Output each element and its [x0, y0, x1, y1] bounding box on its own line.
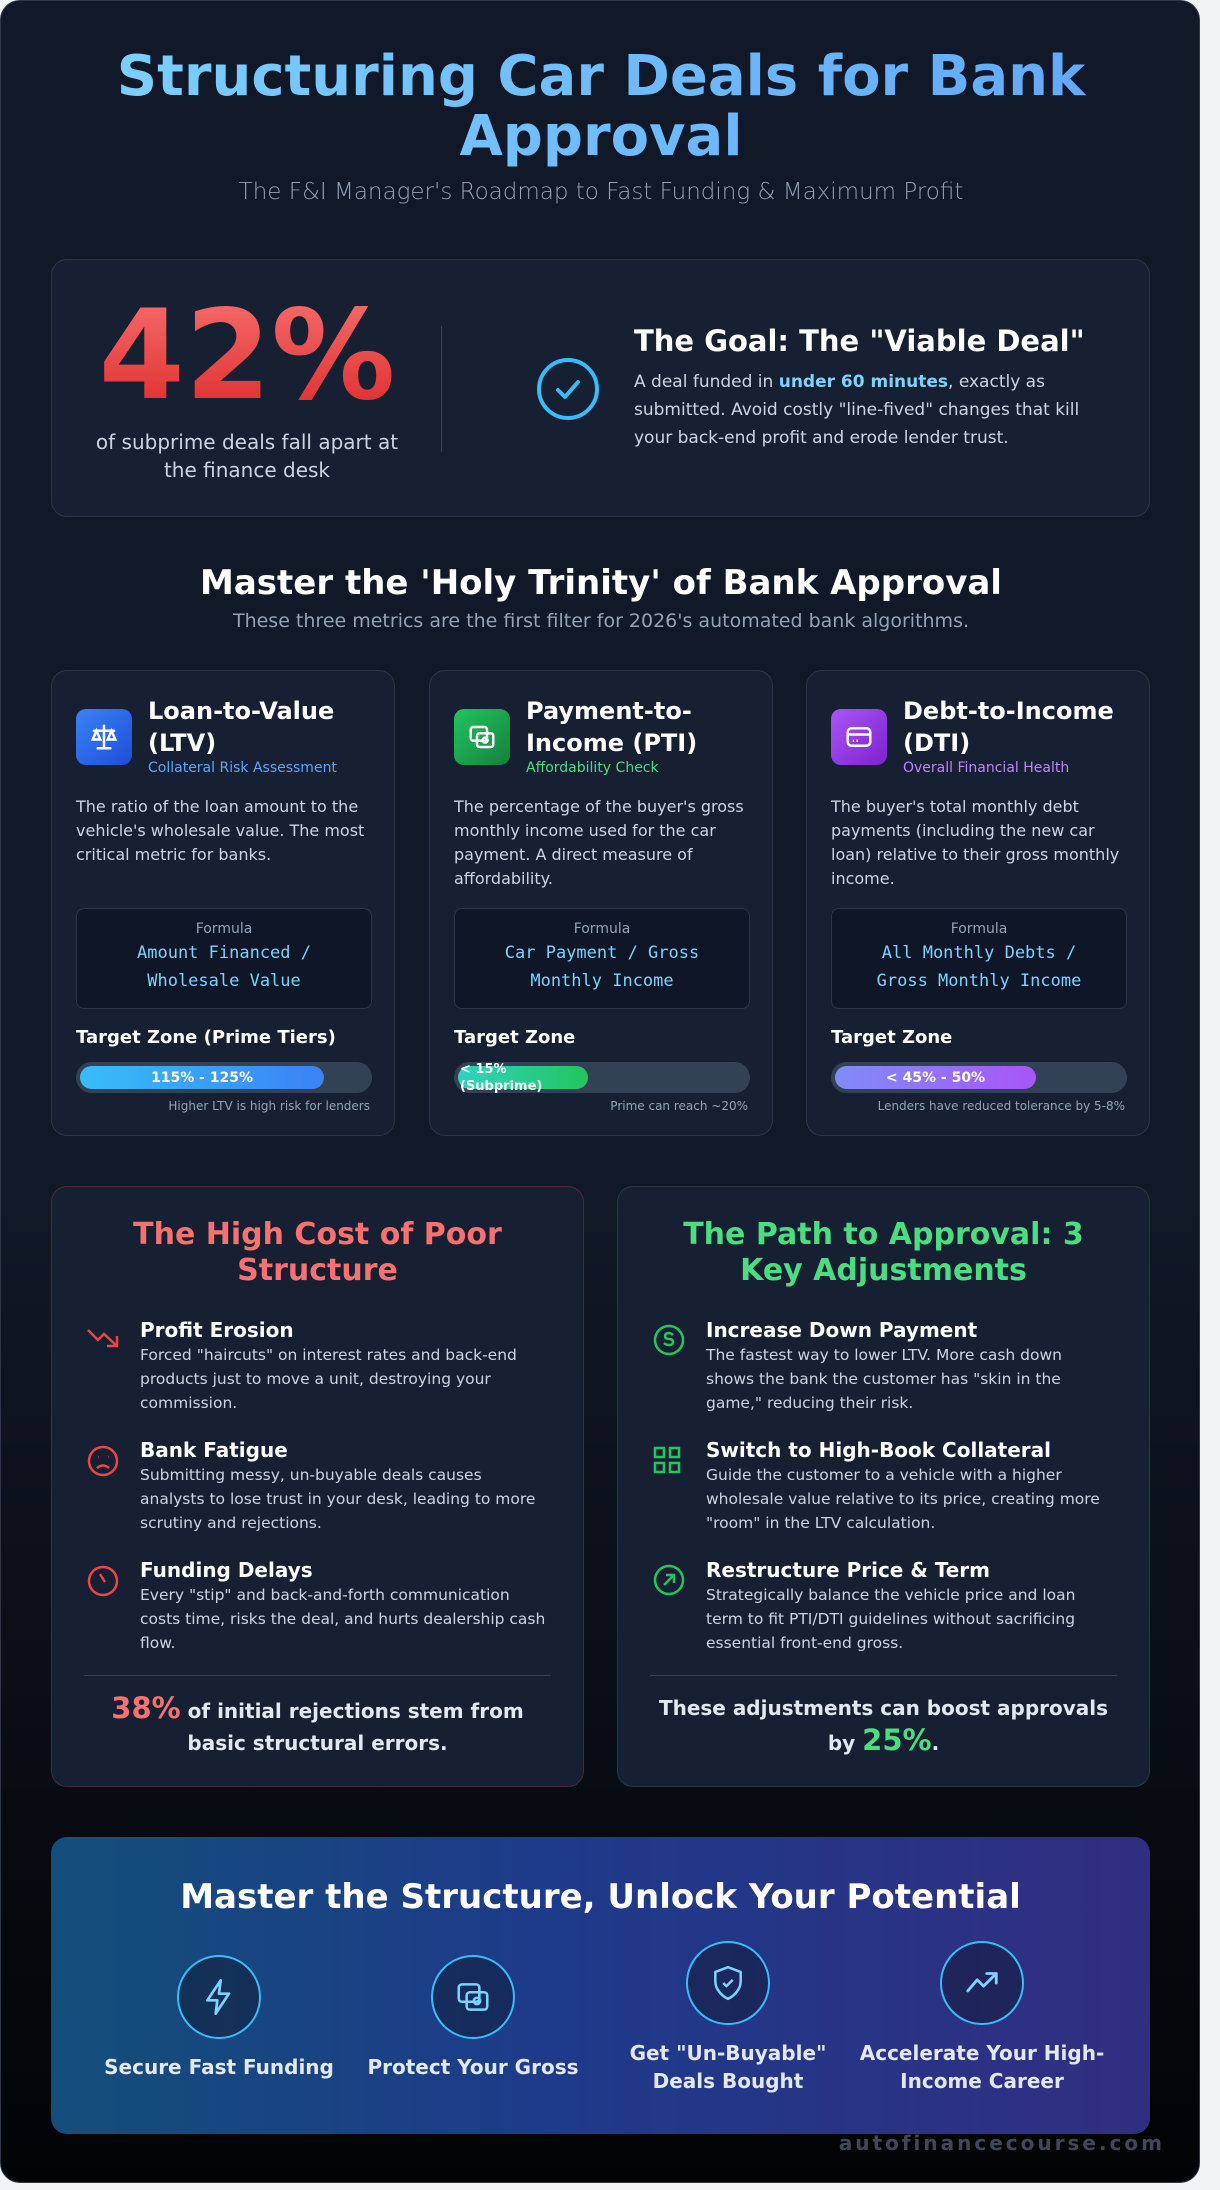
heading: The High Cost of Poor	[133, 1217, 502, 1252]
footer brand: autofinancecourse.com	[839, 2131, 1165, 2155]
card title: (DTI)	[903, 729, 970, 757]
heading: Structure	[237, 1253, 398, 1288]
item: bank fatigue: Bank Fatigue	[140, 1438, 288, 1462]
card title: Debt-to-Income	[903, 697, 1114, 725]
panel: DTI	[806, 670, 1150, 1136]
item: down payment: Increase Down Payment	[706, 1318, 977, 1342]
card title: (LTV)	[148, 729, 216, 757]
stat callout: 38% of initial rejections stem from basic structural errors.	[111, 1691, 524, 1755]
target bar: < 15%	[460, 1062, 507, 1076]
icon: card	[831, 709, 887, 765]
target zone label: Target Zone (Prime Tiers)	[76, 1027, 336, 1048]
heading	[683, 1217, 1084, 1288]
formula box: Formula	[574, 921, 630, 937]
card title	[526, 697, 697, 757]
formula box: Monthly Income	[530, 971, 674, 991]
section subtitle: These three metrics are the first filter for 2026's automated bank algorithms.	[233, 610, 969, 632]
formula box: Amount Financed /	[137, 943, 311, 963]
stat caption: of subprime deals fall apart at the finance desk	[96, 430, 398, 482]
card title: Payment-to-	[526, 697, 692, 725]
benefit: career	[860, 1941, 1104, 2093]
card title: Income (PTI)	[526, 729, 697, 757]
title: Structuring Car Deals for Bank	[117, 44, 1085, 109]
item: high-book collateral: Guide the customer to a vehicle with a higher wholesale value relative to its price, creating more "room" in the LTV calculation.	[706, 1466, 1100, 1532]
panel: high cost	[51, 1186, 584, 1787]
item: down payment: The fastest way to lower LTV. More cash down shows the bank the customer has "skin in the game," reducing their risk.	[706, 1346, 1062, 1412]
panel: DTI: Lenders have reduced tolerance by 5-8%	[878, 1099, 1125, 1113]
panel: PTI	[429, 670, 773, 1136]
icon: trend down	[87, 1329, 118, 1348]
stat callout: These adjustments can boost approvals by 25%.	[659, 1696, 1108, 1757]
target bar	[831, 1062, 1127, 1093]
icon: grid	[654, 1446, 680, 1474]
formula box: All Monthly Debts /	[882, 943, 1076, 963]
benefit: protect gross: Protect Your Gross	[367, 2055, 579, 2079]
title	[1, 47, 1201, 167]
item: restructure: Strategically balance the vehicle price and loan term to fit PTI/DTI guidelines without sacrificing essential front-end gross.	[706, 1586, 1075, 1652]
formula box: Formula	[196, 921, 252, 937]
benefit: fast funding	[104, 1955, 334, 2079]
heading: The Path to Approval: 3	[683, 1217, 1084, 1252]
section heading: Master the 'Holy Trinity' of Bank Approval	[200, 563, 1002, 603]
benefit: protect gross	[367, 1955, 579, 2079]
item: high-book collateral: Switch to High-Book Collateral	[706, 1438, 1051, 1462]
panel: stat and goal	[51, 259, 1150, 517]
icon: check circle	[537, 358, 599, 420]
item: funding delays: Every "stip" and back-and-forth communication costs time, risks the deal, and hurts dealership cash flow.	[140, 1586, 545, 1652]
formula box: Formula	[951, 921, 1007, 937]
panel: DTI: Overall Financial Health	[903, 760, 1069, 776]
heading	[133, 1217, 502, 1288]
panel: LTV	[51, 670, 395, 1136]
formula box: Car Payment / Gross	[505, 943, 699, 963]
goal text: A deal funded in under 60 minutes, exactly as submitted. Avoid costly "line-fived" changes that kill your back-end profit and erode lender trust.	[634, 372, 1079, 448]
target bar: < 45% - 50%	[886, 1070, 985, 1086]
goal heading: The Goal: The "Viable Deal"	[634, 324, 1085, 358]
card title: Loan-to-Value	[148, 697, 334, 725]
benefit: career: Accelerate Your High-	[860, 2041, 1104, 2065]
icon: dollar	[654, 1324, 684, 1356]
target zone label: Target Zone	[454, 1027, 575, 1048]
icon: sad face	[88, 1446, 118, 1476]
heading: Key Adjustments	[740, 1253, 1027, 1288]
target zone label: Target Zone	[831, 1027, 952, 1048]
card title	[148, 697, 334, 757]
target bar: (Subprime)	[460, 1078, 542, 1094]
icon: clock	[88, 1566, 118, 1596]
benefit: fast funding: Secure Fast Funding	[104, 2055, 334, 2079]
panel: path to approval	[617, 1186, 1150, 1787]
formula box	[454, 908, 750, 1009]
formula box: Wholesale Value	[147, 971, 301, 991]
CTA heading: Master the Structure, Unlock Your Potential	[180, 1877, 1021, 1917]
title: Approval	[459, 104, 743, 169]
item: profit erosion: Profit Erosion	[140, 1318, 294, 1342]
icon: money	[454, 709, 510, 765]
description: The ratio of the loan amount to the vehicle's wholesale value. The most critical metric for banks.	[76, 797, 364, 864]
target bar	[454, 1062, 750, 1093]
panel: CTA	[51, 1837, 1150, 2134]
item: restructure: Restructure Price & Term	[706, 1558, 990, 1582]
panel: PTI: Prime can reach ~20%	[610, 1099, 748, 1113]
card title	[903, 697, 1114, 757]
benefit: deals bought: Get "Un-Buyable"	[630, 2041, 826, 2065]
formula box	[76, 908, 372, 1009]
description: The buyer's total monthly debt payments (including the new car loan) relative to their gross monthly income.	[831, 797, 1119, 888]
benefit: deals bought: Deals Bought	[653, 2069, 803, 2093]
formula box	[831, 908, 1127, 1009]
panel: LTV: Higher LTV is high risk for lenders	[168, 1099, 370, 1113]
big stat 42%: 42%	[99, 284, 395, 428]
target bar: 115% - 125%	[151, 1070, 253, 1086]
icon: scale	[76, 709, 132, 765]
formula box: Gross Monthly Income	[877, 971, 1081, 991]
icon: arrow circle	[654, 1564, 684, 1596]
benefit: deals bought	[630, 1941, 826, 2093]
benefit: career: Income Career	[900, 2069, 1064, 2093]
item: funding delays: Funding Delays	[140, 1558, 313, 1582]
panel: PTI: Affordability Check	[526, 760, 659, 776]
target bar	[76, 1062, 372, 1093]
item: bank fatigue: Submitting messy, un-buyable deals causes analysts to lose trust in your desk, leading to more scrutiny and rejections.	[140, 1466, 535, 1532]
subtitle: The F&I Manager's Roadmap to Fast Funding & Maximum Profit	[239, 179, 963, 205]
item: profit erosion: Forced "haircuts" on interest rates and back-end products just to move a unit, destroying your commission.	[140, 1346, 517, 1412]
panel: LTV: Collateral Risk Assessment	[148, 760, 337, 776]
description: The percentage of the buyer's gross monthly income used for the car payment. A direct measure of affordability.	[454, 797, 744, 888]
